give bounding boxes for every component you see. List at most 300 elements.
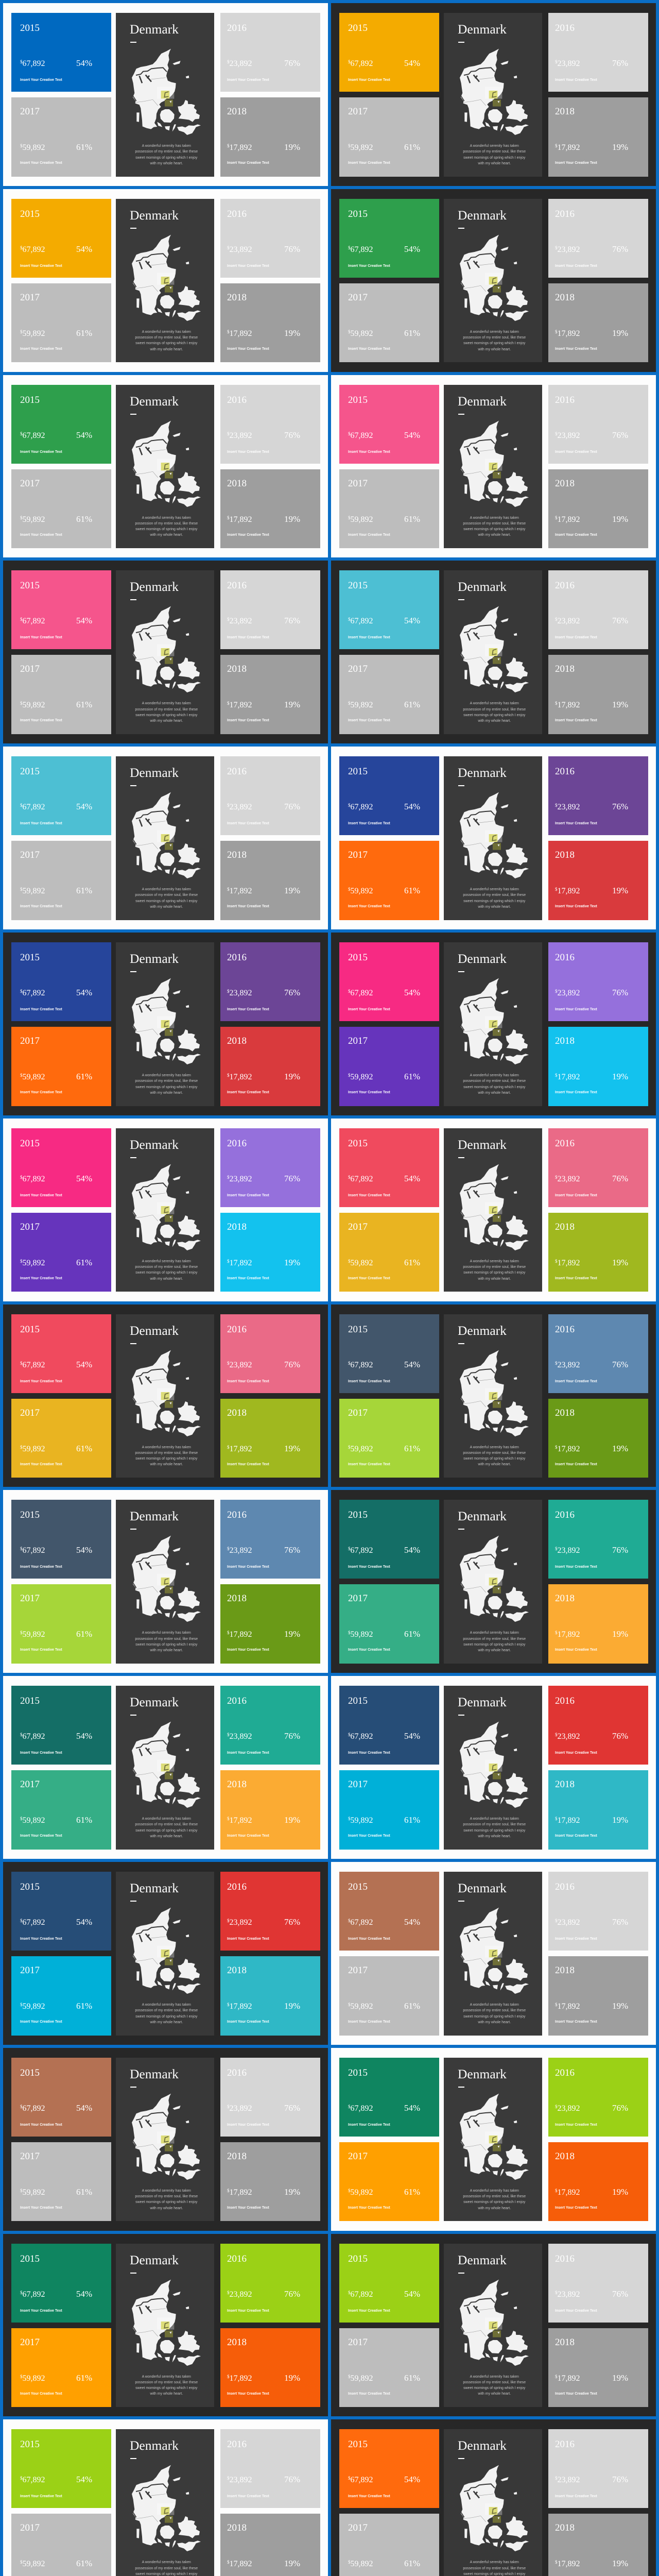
card: 2016: 76% xyxy=(284,1174,300,1183)
card: 2016: Insert Your Creative Text xyxy=(555,2123,597,2127)
card: 2017: Insert Your Creative Text xyxy=(20,347,62,351)
card: 2018: 19% xyxy=(284,1444,300,1453)
panel: Denmark: sweet mornings of spring which I enjoy xyxy=(463,2015,525,2019)
card: 2016: Insert Your Creative Text xyxy=(555,1008,597,1011)
panel: Denmark xyxy=(444,756,542,920)
card: 2018: $17,892 xyxy=(555,2188,580,2197)
panel: Denmark: Denmark xyxy=(458,394,507,409)
panel: Denmark: A wonderful serenity has taken xyxy=(470,2189,519,2193)
card: 2016: Insert Your Creative Text xyxy=(227,2309,269,2313)
panel: Denmark: A wonderful serenity has taken xyxy=(142,330,191,334)
card: 2017: $59,892 xyxy=(348,2560,373,2568)
card: 2016: 76% xyxy=(612,1731,628,1741)
card: 2017 xyxy=(339,1956,439,2035)
card: 2017 xyxy=(11,1399,111,1478)
card: 2018: Insert Your Creative Text xyxy=(227,905,269,908)
card: 2017: 2017 xyxy=(20,106,40,117)
card: 2016 xyxy=(220,199,320,278)
card: 2015: 2015 xyxy=(348,1696,368,1706)
card: 2018: Insert Your Creative Text xyxy=(555,347,597,351)
panel: Denmark: Denmark xyxy=(458,1137,507,1152)
card: 2018 xyxy=(548,1027,648,1106)
card: 2018: 19% xyxy=(612,2187,628,2197)
card: 2018 xyxy=(548,2142,648,2221)
card: 2018: Insert Your Creative Text xyxy=(227,1463,269,1466)
slide 23: brown on dark xyxy=(3,2048,328,2231)
panel: Denmark: with my whole heart. xyxy=(478,2392,511,2396)
card: 2018 xyxy=(220,2328,320,2407)
card: 2018: 2018 xyxy=(555,478,575,489)
card: 2015: Insert Your Creative Text xyxy=(348,264,390,268)
card: 2015: 54% xyxy=(404,1917,420,1927)
card: 2017: $59,892 xyxy=(20,2002,45,2011)
card: 2017 xyxy=(339,283,439,362)
card: 2018: 2018 xyxy=(227,1593,247,1604)
card: 2017: Insert Your Creative Text xyxy=(20,161,62,165)
panel: Denmark: Denmark xyxy=(130,1694,179,1709)
card: 2016: $23,892 xyxy=(555,1918,580,1927)
panel: Denmark: possession of my entire soul, like these xyxy=(135,1451,198,1455)
panel: Denmark: with my whole heart. xyxy=(150,1649,183,1652)
panel: Denmark: Denmark xyxy=(130,208,179,223)
card: 2016 xyxy=(220,1872,320,1951)
card: 2017 xyxy=(339,2328,439,2407)
card: 2017: 61% xyxy=(404,1072,420,1081)
panel: Denmark: Denmark xyxy=(130,394,179,409)
card: 2017: $59,892 xyxy=(348,1073,373,1081)
card: 2016: 2016 xyxy=(227,1324,247,1335)
card: 2015: 54% xyxy=(404,1360,420,1369)
panel: Denmark: A wonderful serenity has taken xyxy=(470,888,519,891)
card: 2015: 2015 xyxy=(348,2439,368,2450)
panel: Denmark: A wonderful serenity has taken xyxy=(470,2003,519,2007)
card: 2015: 54% xyxy=(76,802,92,811)
card: 2018: 19% xyxy=(284,1258,300,1267)
card: 2018: $17,892 xyxy=(555,1073,580,1081)
card: 2017: Insert Your Creative Text xyxy=(348,1277,390,1280)
slide 28: orange on dark xyxy=(331,2419,656,2576)
panel: Denmark: possession of my entire soul, like these xyxy=(463,150,526,154)
card: 2016: Insert Your Creative Text xyxy=(227,2123,269,2127)
card: 2016 xyxy=(220,756,320,835)
panel: Denmark: sweet mornings of spring which I enjoy xyxy=(135,156,197,160)
panel: Denmark: sweet mornings of spring which I enjoy xyxy=(463,900,525,903)
card: 2015: 2015 xyxy=(20,2253,40,2264)
card: 2015 xyxy=(339,2244,439,2323)
card: 2018: 19% xyxy=(284,328,300,338)
panel: Denmark xyxy=(116,570,214,734)
card: 2018: Insert Your Creative Text xyxy=(555,2392,597,2396)
card: 2017: 2017 xyxy=(20,2151,40,2162)
card: 2015: Insert Your Creative Text xyxy=(20,1380,62,1383)
panel: Denmark: possession of my entire soul, like these xyxy=(135,1637,198,1641)
card: 2016 xyxy=(548,1314,648,1393)
card: 2018: 2018 xyxy=(227,1779,247,1790)
card: 2015: 2015 xyxy=(20,395,40,405)
panel: Denmark: sweet mornings of spring which I enjoy xyxy=(135,2200,197,2204)
card: 2015: 2015 xyxy=(348,580,368,591)
card: 2016: 76% xyxy=(284,1731,300,1741)
panel: Denmark: with my whole heart. xyxy=(150,1277,183,1281)
card: 2015: 2015 xyxy=(348,2253,368,2264)
card: 2015: 54% xyxy=(404,988,420,997)
card: 2016: 2016 xyxy=(227,1138,247,1149)
card: 2015: 2015 xyxy=(20,766,40,777)
card: 2017 xyxy=(339,1027,439,1106)
panel: Denmark: sweet mornings of spring which I enjoy xyxy=(135,1086,197,1089)
panel: Denmark: Denmark xyxy=(130,2066,179,2081)
card: 2017: 61% xyxy=(76,2001,92,2011)
card: 2015: 54% xyxy=(76,244,92,254)
card: 2017: 61% xyxy=(76,700,92,709)
panel: Denmark: sweet mornings of spring which I enjoy xyxy=(135,2572,197,2576)
card: 2015: 2015 xyxy=(348,209,368,219)
panel: Denmark: Denmark xyxy=(130,1880,179,1895)
card: 2017: $59,892 xyxy=(20,2560,45,2568)
card: 2017: 2017 xyxy=(348,2337,368,2348)
card: 2016 xyxy=(220,1314,320,1393)
panel: Denmark: with my whole heart. xyxy=(478,2021,511,2024)
panel: Denmark: A wonderful serenity has taken xyxy=(470,702,519,705)
card: 2018: 2018 xyxy=(555,1593,575,1604)
card: 2018: $17,892 xyxy=(227,2002,252,2011)
card: 2017: $59,892 xyxy=(348,1445,373,1453)
card: 2015: Insert Your Creative Text xyxy=(20,78,62,82)
card: 2016 xyxy=(548,2429,648,2508)
card: 2016: $23,892 xyxy=(227,1918,252,1927)
panel: Denmark xyxy=(444,1500,542,1664)
card: 2015: 54% xyxy=(76,1360,92,1369)
card: 2017: 2017 xyxy=(20,1593,40,1604)
card: 2016: 2016 xyxy=(555,395,575,405)
card: 2018: $17,892 xyxy=(227,1630,252,1639)
card: 2018: Insert Your Creative Text xyxy=(227,347,269,351)
card: 2017: $59,892 xyxy=(348,329,373,338)
slide 22: brown on light xyxy=(331,1862,656,2045)
card: 2016: $23,892 xyxy=(555,1546,580,1555)
card: 2015: 54% xyxy=(76,616,92,625)
card: 2017: Insert Your Creative Text xyxy=(20,533,62,537)
panel: Denmark: with my whole heart. xyxy=(478,162,511,165)
panel: Denmark: possession of my entire soul, like these xyxy=(463,1451,526,1455)
card: 2017 xyxy=(11,97,111,176)
card: 2016: 76% xyxy=(612,1545,628,1555)
card: 2017: Insert Your Creative Text xyxy=(348,533,390,537)
card: 2017: 61% xyxy=(76,1072,92,1081)
panel: Denmark xyxy=(116,2429,214,2576)
card: 2015: $67,892 xyxy=(20,617,45,625)
card: 2018: Insert Your Creative Text xyxy=(227,1091,269,1094)
card: 2015: $67,892 xyxy=(348,1175,373,1183)
card: 2016: 2016 xyxy=(555,580,575,591)
card: 2016 xyxy=(220,1500,320,1579)
card: 2015: 54% xyxy=(404,244,420,254)
card: 2017 xyxy=(339,841,439,920)
card: 2018: $17,892 xyxy=(227,143,252,152)
card: 2018: Insert Your Creative Text xyxy=(555,533,597,537)
panel: Denmark: Denmark xyxy=(458,2438,507,2453)
card: 2015: Insert Your Creative Text xyxy=(348,1751,390,1755)
card: 2018: Insert Your Creative Text xyxy=(227,2020,269,2024)
panel: Denmark: sweet mornings of spring which I enjoy xyxy=(135,1271,197,1275)
card: 2018: $17,892 xyxy=(555,2560,580,2568)
card: 2015: 2015 xyxy=(20,2439,40,2450)
card: 2016: 76% xyxy=(284,1545,300,1555)
panel: Denmark: Denmark xyxy=(458,1509,507,1523)
card: 2017: Insert Your Creative Text xyxy=(20,2392,62,2396)
card: 2015: 54% xyxy=(404,2289,420,2299)
card: 2017: Insert Your Creative Text xyxy=(20,1648,62,1652)
card: 2016: 76% xyxy=(612,1174,628,1183)
card: 2018: $17,892 xyxy=(555,329,580,338)
panel: Denmark: Denmark xyxy=(130,1137,179,1152)
card: 2018: $17,892 xyxy=(555,2002,580,2011)
card: 2017: Insert Your Creative Text xyxy=(348,347,390,351)
card: 2017: $59,892 xyxy=(348,1259,373,1267)
card: 2015: 54% xyxy=(76,1731,92,1741)
card: 2016: 2016 xyxy=(555,1882,575,1892)
card: 2018: 2018 xyxy=(555,1408,575,1418)
card: 2015 xyxy=(11,1128,111,1207)
card: 2018: 2018 xyxy=(555,1779,575,1790)
slide 6: pink on light xyxy=(331,375,656,557)
panel: Denmark: possession of my entire soul, like these xyxy=(463,1823,526,1826)
card: 2016: 76% xyxy=(612,2475,628,2484)
card: 2016: Insert Your Creative Text xyxy=(227,450,269,454)
card: 2015: $67,892 xyxy=(348,1918,373,1927)
card: 2016: Insert Your Creative Text xyxy=(555,1565,597,1569)
card: 2016: 76% xyxy=(284,58,300,68)
card: 2018: 19% xyxy=(612,886,628,895)
panel: Denmark: with my whole heart. xyxy=(150,2207,183,2210)
card: 2017: 61% xyxy=(76,514,92,524)
panel: Denmark: with my whole heart. xyxy=(478,2207,511,2210)
card: 2015: $67,892 xyxy=(348,431,373,440)
card: 2015: $67,892 xyxy=(348,617,373,625)
card: 2016: 76% xyxy=(284,616,300,625)
card: 2015: $67,892 xyxy=(20,2476,45,2484)
card: 2018: 2018 xyxy=(555,2151,575,2162)
card: 2017: 61% xyxy=(404,1629,420,1639)
card: 2017 xyxy=(11,655,111,734)
panel: Denmark xyxy=(444,385,542,548)
card: 2015: $67,892 xyxy=(348,1361,373,1369)
card: 2016: Insert Your Creative Text xyxy=(555,1194,597,1197)
panel: Denmark: Denmark xyxy=(458,2252,507,2267)
card: 2018 xyxy=(220,2142,320,2221)
panel: Denmark: possession of my entire soul, like these xyxy=(135,2381,198,2384)
card: 2015: 2015 xyxy=(20,1324,40,1335)
card: 2018: 2018 xyxy=(227,664,247,674)
card: 2015: Insert Your Creative Text xyxy=(348,450,390,454)
card: 2017: Insert Your Creative Text xyxy=(20,1277,62,1280)
card: 2017: 2017 xyxy=(20,664,40,674)
card: 2016: $23,892 xyxy=(555,1732,580,1741)
card: 2016: 2016 xyxy=(555,23,575,33)
panel: Denmark xyxy=(444,2058,542,2221)
card: 2015 xyxy=(339,2429,439,2508)
card: 2017: 2017 xyxy=(348,2522,368,2533)
card: 2018: Insert Your Creative Text xyxy=(555,161,597,165)
card: 2016: $23,892 xyxy=(555,2104,580,2113)
card: 2015: $67,892 xyxy=(20,2104,45,2113)
card: 2017: 2017 xyxy=(20,850,40,860)
card: 2018 xyxy=(220,283,320,362)
card: 2016 xyxy=(220,570,320,649)
card: 2017: $59,892 xyxy=(20,1445,45,1453)
slide 25: green-lime set on dark xyxy=(3,2234,328,2416)
card: 2016 xyxy=(220,1128,320,1207)
slide 20: deep blue set on light xyxy=(331,1676,656,1859)
card: 2015: Insert Your Creative Text xyxy=(20,1751,62,1755)
card: 2016: 76% xyxy=(284,1360,300,1369)
card: 2016: $23,892 xyxy=(555,1361,580,1369)
card: 2016: $23,892 xyxy=(555,1175,580,1183)
card: 2017: $59,892 xyxy=(348,515,373,524)
card: 2018: $17,892 xyxy=(227,1073,252,1081)
card: 2018: 2018 xyxy=(227,1036,247,1046)
card: 2015: 2015 xyxy=(20,209,40,219)
card: 2017: $59,892 xyxy=(20,2188,45,2197)
card: 2016: $23,892 xyxy=(227,1175,252,1183)
panel: Denmark: possession of my entire soul, like these xyxy=(135,893,198,897)
card: 2017: Insert Your Creative Text xyxy=(20,2020,62,2024)
card: 2015: Insert Your Creative Text xyxy=(20,822,62,825)
slide 12: magenta set on dark xyxy=(331,933,656,1115)
card: 2017: $59,892 xyxy=(20,329,45,338)
card: 2016: Insert Your Creative Text xyxy=(227,264,269,268)
card: 2017: $59,892 xyxy=(20,515,45,524)
card: 2015 xyxy=(11,1500,111,1579)
panel: Denmark: Denmark xyxy=(130,1323,179,1338)
panel: Denmark: Denmark xyxy=(458,208,507,223)
panel: Denmark: with my whole heart. xyxy=(478,1835,511,1838)
card: 2017: 61% xyxy=(404,1815,420,1825)
card: 2017: 2017 xyxy=(348,478,368,489)
slide 15: red set on dark xyxy=(3,1304,328,1487)
panel: Denmark: A wonderful serenity has taken xyxy=(470,1446,519,1449)
card: 2016: Insert Your Creative Text xyxy=(555,636,597,639)
panel: Denmark: possession of my entire soul, like these xyxy=(463,336,526,340)
card: 2016: $23,892 xyxy=(227,989,252,997)
slide 2: amber on dark xyxy=(331,3,656,186)
card: 2018: Insert Your Creative Text xyxy=(555,1277,597,1280)
panel: Denmark: possession of my entire soul, like these xyxy=(463,893,526,897)
card: 2015: $67,892 xyxy=(348,803,373,811)
card: 2016: $23,892 xyxy=(227,1546,252,1555)
card: 2017: $59,892 xyxy=(348,701,373,709)
card: 2015: 54% xyxy=(404,616,420,625)
panel: Denmark: Denmark xyxy=(458,765,507,780)
card: 2015: 54% xyxy=(76,1174,92,1183)
card: 2016: $23,892 xyxy=(227,2290,252,2299)
panel: Denmark: sweet mornings of spring which I enjoy xyxy=(463,1086,525,1089)
card: 2015: 2015 xyxy=(20,580,40,591)
card: 2015: Insert Your Creative Text xyxy=(348,1194,390,1197)
slide 1: blue on light xyxy=(3,3,328,186)
panel: Denmark: possession of my entire soul, like these xyxy=(463,1265,526,1269)
card: 2015: 2015 xyxy=(348,395,368,405)
panel: Denmark xyxy=(444,942,542,1106)
panel: Denmark: A wonderful serenity has taken xyxy=(142,2561,191,2564)
card: 2018: 19% xyxy=(612,1258,628,1267)
card: 2016: Insert Your Creative Text xyxy=(555,78,597,82)
panel: Denmark: Denmark xyxy=(458,1880,507,1895)
card: 2015: Insert Your Creative Text xyxy=(20,1937,62,1941)
card: 2016 xyxy=(548,942,648,1021)
card: 2015: 2015 xyxy=(20,1882,40,1892)
panel: Denmark: sweet mornings of spring which I enjoy xyxy=(135,714,197,717)
panel: Denmark: possession of my entire soul, like these xyxy=(135,2009,198,2012)
card: 2018: 2018 xyxy=(227,2522,247,2533)
panel: Denmark: with my whole heart. xyxy=(150,905,183,909)
panel: Denmark: Denmark xyxy=(458,2066,507,2081)
card: 2017: 61% xyxy=(404,886,420,895)
card: 2017: Insert Your Creative Text xyxy=(20,905,62,908)
card: 2015: 2015 xyxy=(20,1696,40,1706)
card: 2017 xyxy=(339,2514,439,2576)
card: 2015: 54% xyxy=(404,1174,420,1183)
panel: Denmark: A wonderful serenity has taken xyxy=(470,1074,519,1077)
card: 2018: $17,892 xyxy=(555,2374,580,2383)
card: 2018: Insert Your Creative Text xyxy=(555,2020,597,2024)
panel: Denmark: sweet mornings of spring which I enjoy xyxy=(463,1457,525,1461)
card: 2016: 2016 xyxy=(227,2253,247,2264)
card: 2018: $17,892 xyxy=(555,143,580,152)
panel: Denmark xyxy=(116,942,214,1106)
card: 2018 xyxy=(220,97,320,176)
card: 2018 xyxy=(220,841,320,920)
slide 13: magenta set on light xyxy=(3,1118,328,1301)
card: 2017 xyxy=(11,2328,111,2407)
panel: Denmark: sweet mornings of spring which I enjoy xyxy=(463,156,525,160)
card: 2018: $17,892 xyxy=(227,2374,252,2383)
panel: Denmark: possession of my entire soul, like these xyxy=(135,1823,198,1826)
panel: Denmark: sweet mornings of spring which I enjoy xyxy=(463,2200,525,2204)
card: 2015 xyxy=(339,1686,439,1765)
card: 2018: 19% xyxy=(612,514,628,524)
card: 2017: $59,892 xyxy=(348,2188,373,2197)
card: 2017: 61% xyxy=(76,2373,92,2383)
card: 2016: Insert Your Creative Text xyxy=(555,1751,597,1755)
card: 2016 xyxy=(548,1500,648,1579)
panel: Denmark: with my whole heart. xyxy=(150,533,183,537)
card: 2016: 76% xyxy=(612,2289,628,2299)
slide 21: deep blue set on dark xyxy=(3,1862,328,2045)
card: 2017: Insert Your Creative Text xyxy=(20,719,62,722)
card: 2015 xyxy=(11,756,111,835)
card: 2015: $67,892 xyxy=(20,989,45,997)
card: 2018 xyxy=(220,2514,320,2576)
panel: Denmark: Denmark xyxy=(458,22,507,37)
card: 2017 xyxy=(11,841,111,920)
card: 2017: Insert Your Creative Text xyxy=(20,1834,62,1838)
panel: Denmark: Denmark xyxy=(130,2252,179,2267)
card: 2017 xyxy=(11,1027,111,1106)
panel: Denmark: sweet mornings of spring which I enjoy xyxy=(463,528,525,531)
panel: Denmark: Denmark xyxy=(130,22,179,37)
card: 2017: Insert Your Creative Text xyxy=(348,2020,390,2024)
panel: Denmark: with my whole heart. xyxy=(478,905,511,909)
panel: Denmark: with my whole heart. xyxy=(150,2392,183,2396)
card: 2018: 2018 xyxy=(555,1036,575,1046)
card: 2015: 54% xyxy=(76,2475,92,2484)
card: 2018: 19% xyxy=(612,1629,628,1639)
card: 2017: Insert Your Creative Text xyxy=(348,1463,390,1466)
panel: Denmark: A wonderful serenity has taken xyxy=(142,702,191,705)
card: 2017: Insert Your Creative Text xyxy=(348,1834,390,1838)
card: 2017: 61% xyxy=(404,1258,420,1267)
